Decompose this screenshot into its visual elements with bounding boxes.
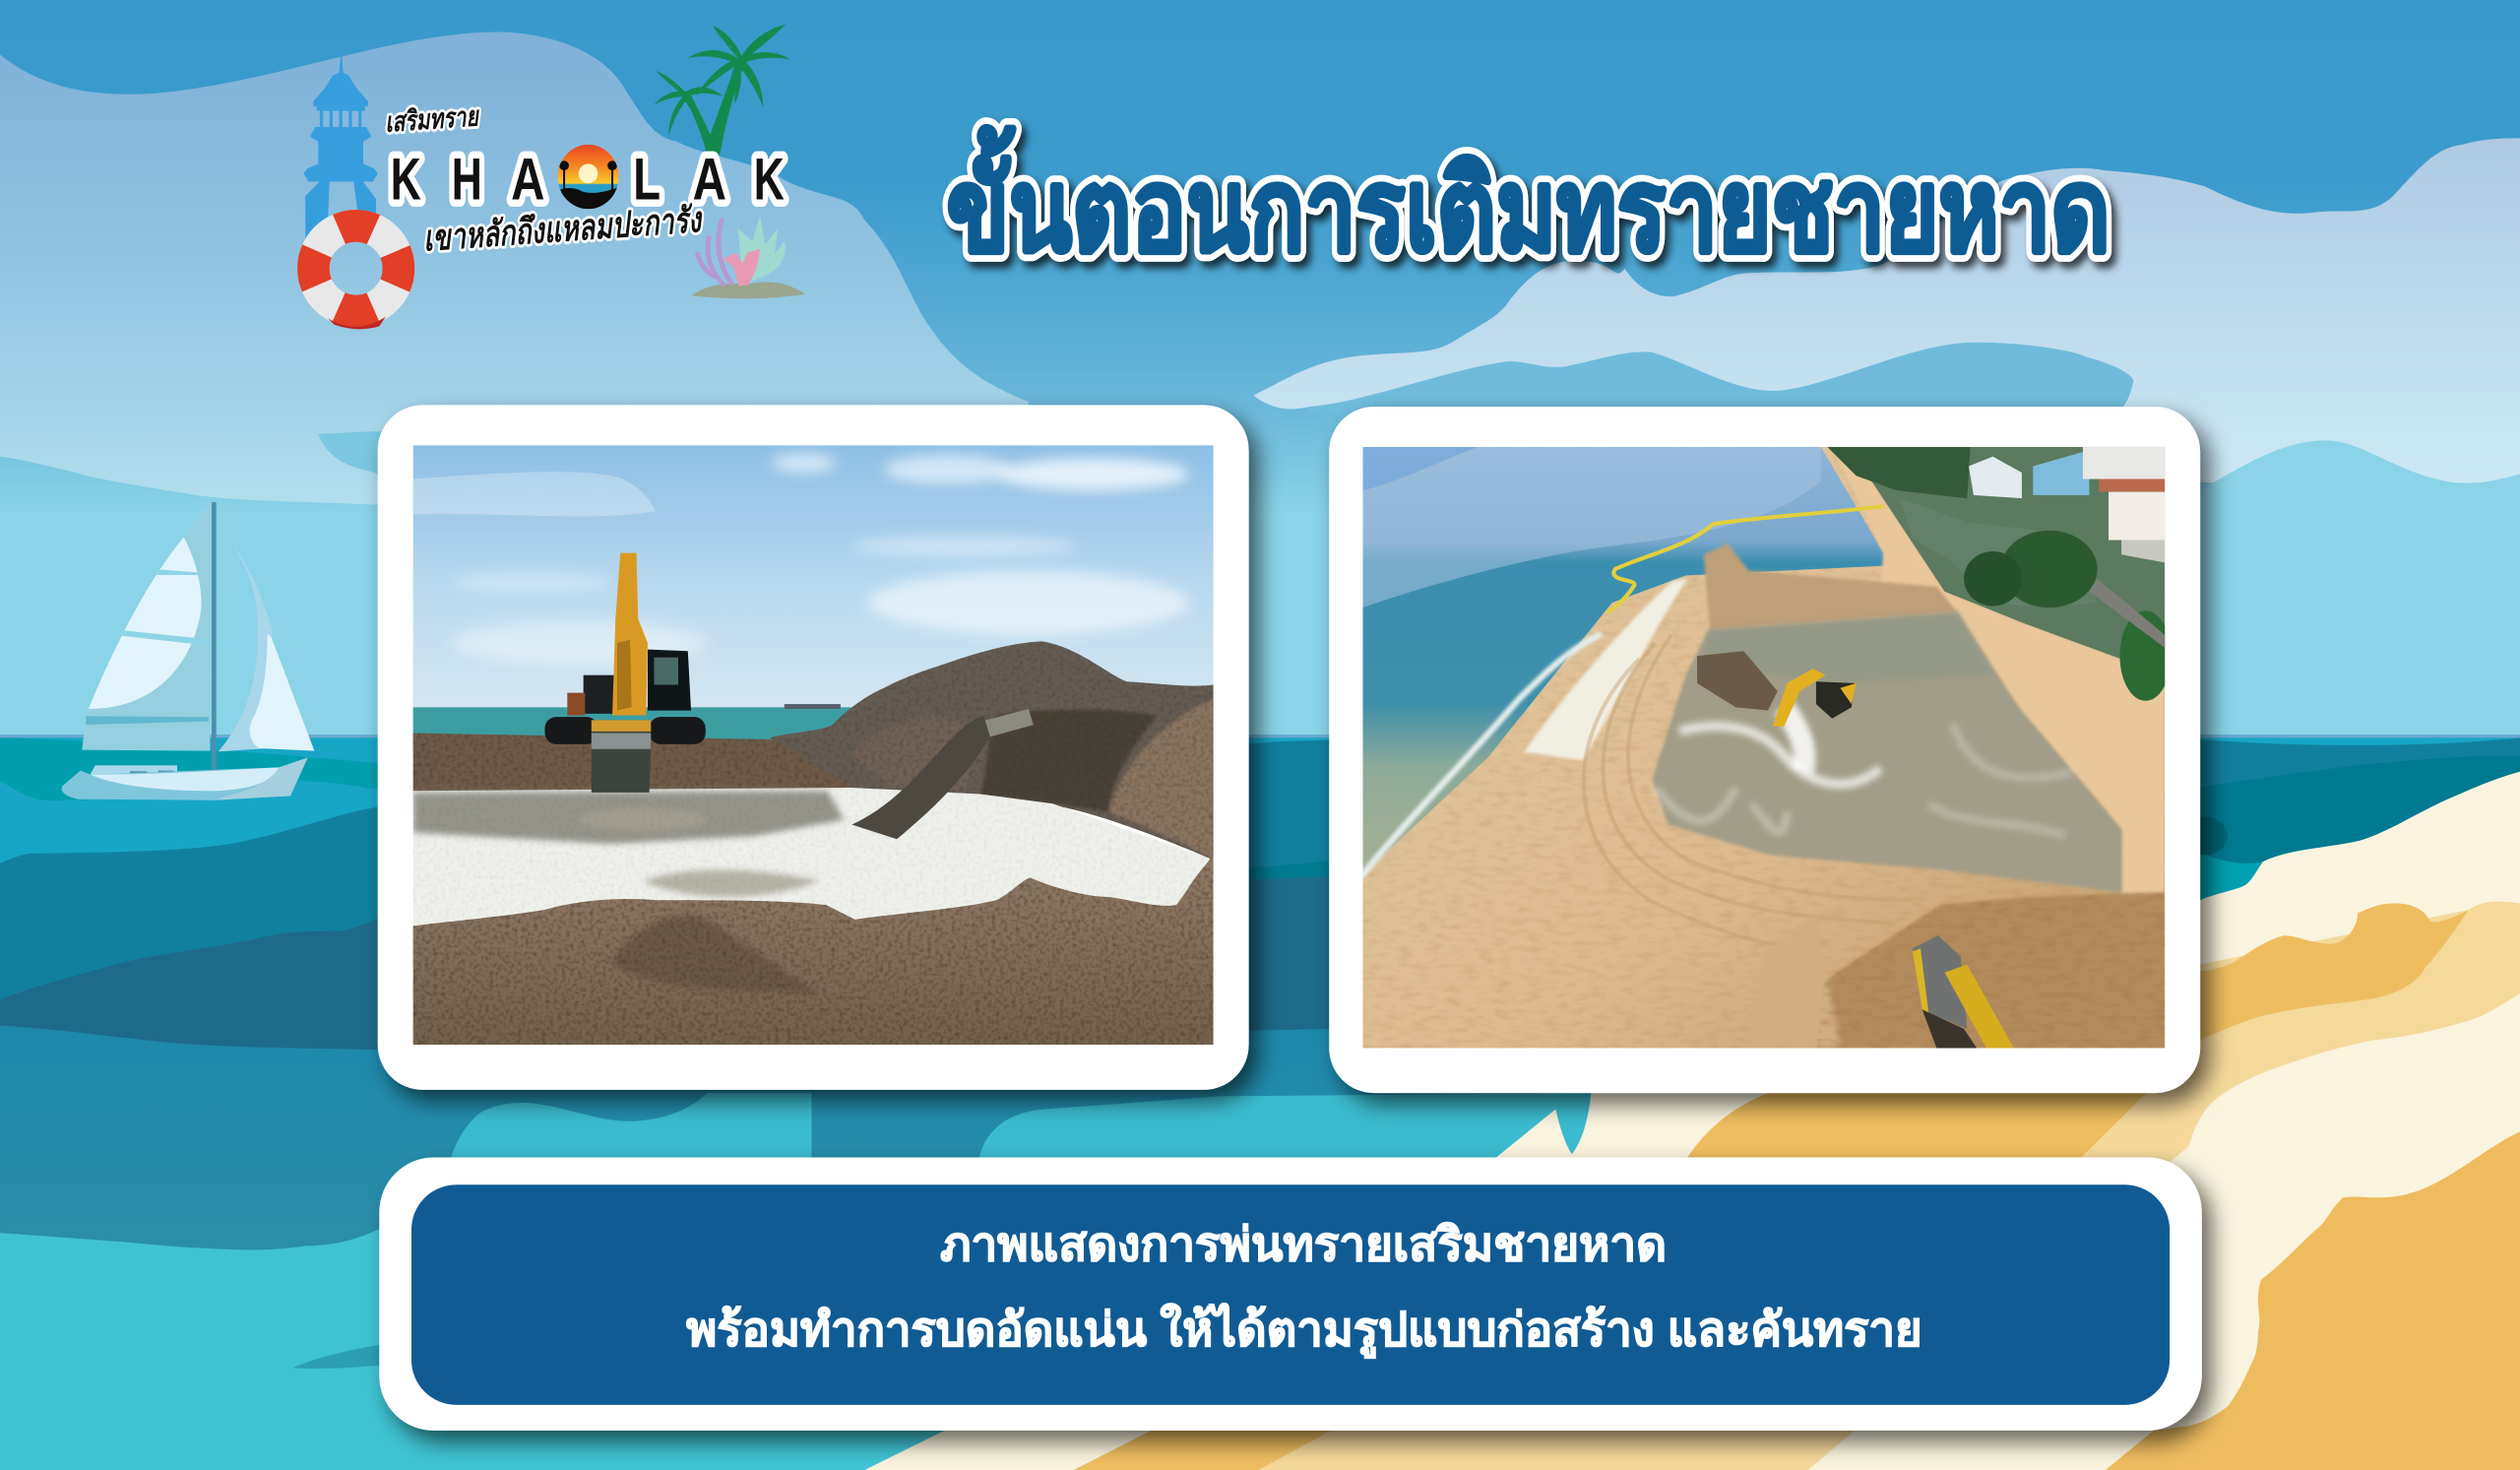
bright teal wedge (2200, 852, 2263, 900)
yellow silt curtain (1607, 506, 1883, 612)
icon: life ring (313, 225, 399, 329)
caption text line 1: ภาพแสดงการพ่นทรายเสริมชายหาด (940, 1219, 1667, 1271)
icon: coral (691, 216, 805, 298)
far sand bank (413, 733, 900, 794)
trees (1827, 447, 1971, 498)
logo word KHAOLAK: L (633, 145, 661, 212)
dark water shape (0, 876, 1334, 1050)
photo: aerial view of sand pumping on beach (1362, 447, 2172, 1048)
beach sand: foreground gold (2106, 1131, 2520, 1470)
sky wave on right side (2200, 440, 2520, 739)
logo word KHAOLAK: A (693, 145, 726, 212)
icon: palm trees (654, 24, 790, 155)
caption text line 2: พร้อมทำการบดอัดแน่น ให้ได้ตามรูปแบบก่อสร้าง และคันทราย (686, 1302, 1922, 1359)
slurry water (413, 788, 1214, 940)
inland area behind trees (1832, 447, 2165, 675)
beach sand: gold patch (1074, 904, 2469, 1470)
sand berm top (1704, 543, 1958, 630)
logo: Khao Lak sand nourishment (304, 24, 805, 329)
photo: excavator and sand slurry pond (413, 445, 1214, 1045)
turquoise blobs between cards and caption (450, 1093, 811, 1161)
small wave behind left card (318, 431, 386, 479)
light wave, upper left (0, 32, 1029, 508)
foreground sand (413, 856, 1214, 1045)
caption background (411, 1184, 2170, 1405)
excavator in pond (1773, 669, 1857, 727)
panel: photo card left (378, 405, 1249, 1090)
settling pond (1652, 612, 2121, 892)
foam in pond (1656, 707, 2073, 836)
beach sand: cream layer (864, 772, 2520, 1470)
icon: sailboat (62, 500, 314, 800)
panel: caption (379, 1157, 2202, 1431)
deep water gradient band (0, 965, 1607, 1249)
logo word KHAOLAK: K (754, 145, 785, 212)
panel: photo card right (1329, 407, 2200, 1093)
logo word KHAOLAK: H (452, 145, 482, 212)
white geotextile strip (1524, 579, 1687, 760)
logo subtitle top: เสริมทราย (384, 100, 481, 138)
title: ขั้นตอนการเติมทรายชายหาด (947, 126, 2110, 276)
logo word KHAOLAK: A (511, 145, 544, 212)
light wave, upper right (1253, 138, 2520, 498)
logo subtitle bottom: เขาหลักถึงแหลมปะการัง (422, 199, 704, 259)
lower turquoise water (0, 1093, 1607, 1470)
discharge pipe and stream (984, 709, 1034, 736)
logo word KHAOLAK (391, 145, 785, 212)
mid-blue wave behind right card (1310, 343, 2133, 412)
berm tyre tracks around pond (1584, 635, 1913, 948)
excavator on sand (1913, 935, 2014, 1048)
teal band, right sea (1249, 755, 2520, 1061)
shore foam (1362, 635, 1599, 874)
beach sand: light gold layer (1258, 902, 2520, 1470)
buildings (1969, 447, 2165, 648)
bottom sand mound (1816, 892, 2165, 1048)
dark sea band (0, 737, 2520, 1037)
title: ขั้นตอนการเติมทรายชายหาด (947, 126, 2110, 276)
icon: lighthouse (304, 50, 378, 265)
excavator (544, 553, 706, 793)
right beach (1832, 447, 2165, 900)
teal band, left sea (0, 737, 386, 800)
logo word KHAOLAK: K (391, 145, 421, 212)
icon: sunset circle (556, 145, 620, 209)
sea (1362, 447, 1883, 874)
sand mound (770, 641, 1214, 860)
